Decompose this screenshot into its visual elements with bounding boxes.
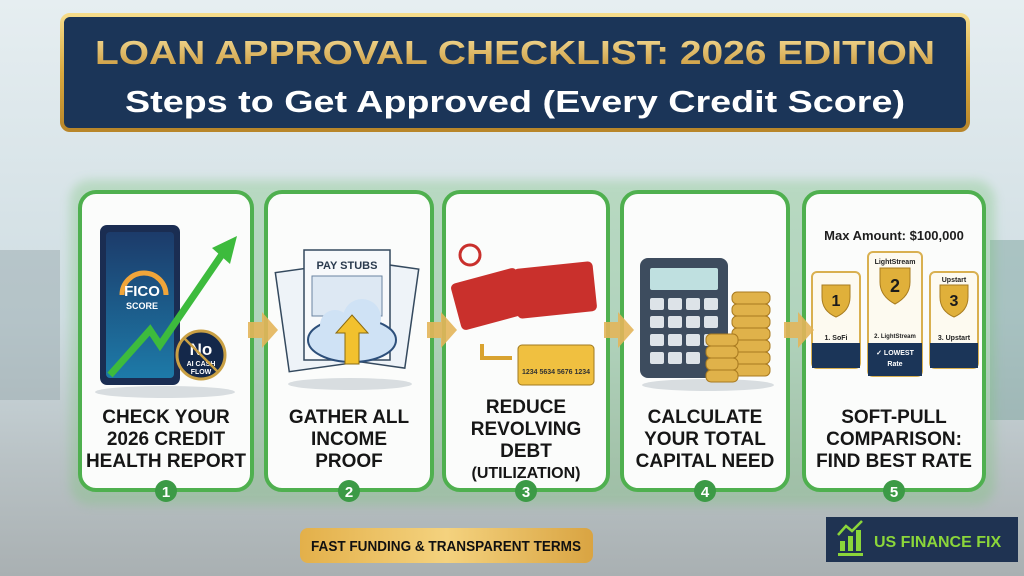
arrow 4 [784,312,814,348]
step text 4: YOUR TOTAL [644,429,766,450]
arrow 3 [604,312,634,348]
lender rankings: 1. SoFi [825,335,848,342]
number 3 [515,480,537,502]
icon: tablet with FICO score: FICO [124,283,160,300]
number 3: 3 [522,484,530,501]
icon: tablet with FICO score: No [190,340,212,359]
lender rankings: 2. LightStream [874,334,916,340]
logo: US FINANCE FIX [874,534,1001,551]
number 5: 5 [890,484,898,501]
step text 1: CHECK YOUR [102,407,230,428]
lender rankings: Upstart [942,277,967,284]
icon: calculator and coins [640,258,774,391]
title: LOAN APPROVAL CHECKLIST: 2026 EDITION [95,34,935,71]
arrow 2 [427,312,457,348]
lender rankings: 1 [832,293,841,310]
logo [826,517,1018,562]
number 2: 2 [345,484,353,501]
bottom banner [300,528,593,563]
step text 1: HEALTH REPORT [86,451,246,472]
icon: broken credit cards [450,245,597,385]
step text 5: FIND BEST RATE [816,451,972,472]
icon: tablet with FICO score: FLOW [191,369,212,376]
step text 3: REVOLVING [471,419,581,440]
step text 3: DEBT [500,441,552,462]
card 5 [804,192,984,502]
max amount text: Max Amount: $100,000 [824,228,964,243]
icon: tablet with FICO score: SCORE [126,301,158,311]
step text 5: SOFT-PULL [841,407,947,428]
number 5 [883,480,905,502]
icon: pay stubs and cloud: PAY STUBS [317,260,377,272]
lender rankings: 2 [890,276,900,296]
card 1 [80,192,252,502]
step text 5: COMPARISON: [826,429,962,450]
step text 4: CALCULATE [648,407,762,428]
subtitle: Steps to Get Approved (Every Credit Score) [125,84,905,119]
step text 3: REDUCE [486,397,566,418]
lender rankings: Rate [887,361,903,368]
icon: broken credit cards: 1234 5634 5676 1234 [522,369,590,376]
bottom banner: FAST FUNDING & TRANSPARENT TERMS [311,538,581,555]
lender rankings: ✓ LOWEST [876,350,915,357]
step text 3: (UTILIZATION) [471,465,581,482]
title panel [62,15,968,130]
icon: chart [838,521,863,556]
card 4 [622,192,788,502]
lender rankings [812,252,978,376]
lender rankings: 3 [950,293,959,310]
number 4: 4 [701,484,710,501]
step text 2: INCOME [311,429,387,450]
lender rankings: 3. Upstart [938,335,971,342]
lender rankings: LightStream [875,259,915,266]
arrow 1 [248,312,278,348]
icon: tablet with FICO score: AI CASH [187,361,215,368]
step text 2: GATHER ALL [289,407,410,428]
icon: pay stubs and cloud [275,250,419,390]
step text 4: CAPITAL NEED [636,451,774,472]
number 1 [155,480,177,502]
card 3 [444,192,608,502]
step text 2: PROOF [315,451,383,472]
number 1: 1 [162,484,170,501]
card 2 [266,192,432,502]
step text 1: 2026 CREDIT [107,429,226,450]
number 4 [694,480,716,502]
icon: tablet with FICO score [95,225,237,398]
number 2 [338,480,360,502]
